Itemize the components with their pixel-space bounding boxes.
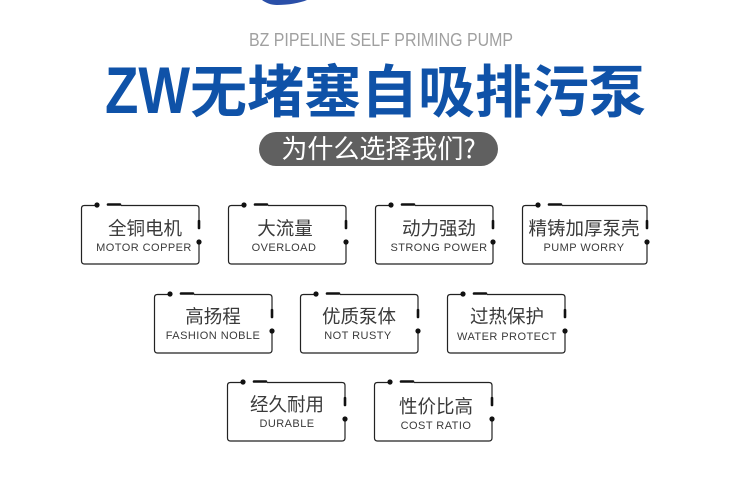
card: cost ratio: 性价比高	[399, 393, 473, 419]
card: water protect: WATER PROTECT	[457, 331, 557, 343]
card: pump worry: PUMP WORRY	[543, 242, 625, 254]
card: durable: DURABLE	[259, 418, 315, 430]
card: not rusty: 优质泵体	[322, 303, 396, 329]
title: 无堵塞自吸排污泵	[190, 47, 646, 129]
pump base fragment	[262, 0, 307, 5]
card: cost ratio: COST RATIO	[401, 420, 471, 432]
card: overload	[228, 202, 349, 264]
card: motor copper: 全铜电机	[108, 215, 182, 241]
card: fashion noble: FASHION NOBLE	[166, 330, 260, 342]
card: motor copper	[82, 202, 202, 264]
card: not rusty	[300, 291, 421, 353]
card: durable	[228, 379, 348, 441]
card: overload: OVERLOAD	[252, 242, 316, 254]
card: strong power: STRONG POWER	[390, 242, 488, 254]
card: pump worry: 精铸加厚泵壳	[528, 215, 640, 241]
card: pump worry	[522, 202, 650, 264]
title: ZW	[105, 53, 191, 127]
card: water protect: 过热保护	[470, 303, 544, 329]
card: motor copper: MOTOR COPPER	[96, 242, 192, 254]
card: cost ratio	[374, 379, 495, 441]
subtitle: BZ PIPELINE SELF PRIMING PUMP	[249, 29, 513, 50]
card: fashion noble	[154, 291, 275, 353]
card: overload: 大流量	[257, 215, 313, 241]
card: water protect	[448, 291, 568, 353]
card: durable: 经久耐用	[250, 391, 324, 417]
card: fashion noble: 高扬程	[185, 303, 241, 329]
card: strong power	[376, 202, 496, 264]
why choose us pill: 为什么选择我们?	[281, 129, 476, 166]
card: strong power: 动力强劲	[402, 215, 476, 241]
card: not rusty: NOT RUSTY	[324, 330, 392, 342]
